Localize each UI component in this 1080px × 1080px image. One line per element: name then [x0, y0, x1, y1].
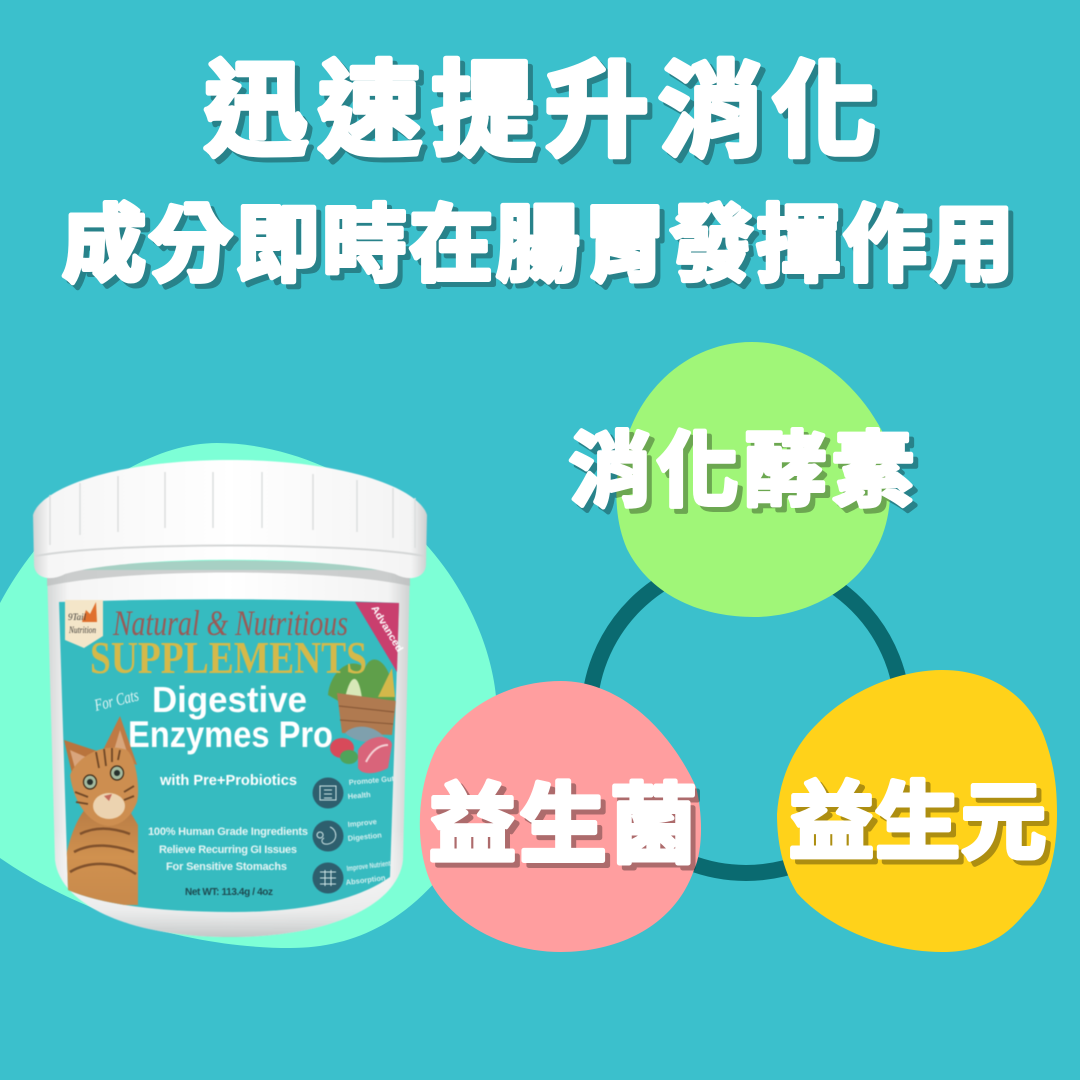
food: leaves — [328, 659, 395, 702]
food — [328, 659, 396, 773]
blob: probiotics (pink) — [420, 681, 701, 952]
jar lid — [33, 460, 427, 578]
enzymes pro: Enzymes Pro — [128, 714, 333, 755]
cat left ear — [64, 740, 96, 772]
label: prebiotics: 益生元 — [789, 776, 1046, 871]
benefit 1: 100% Human Grade Ingredients — [148, 826, 308, 838]
cat left pupil — [87, 779, 93, 785]
natural and nutritious: Natural & Nutritious — [112, 603, 348, 643]
blob: prebiotics (yellow) — [777, 670, 1057, 952]
lid underside shadow — [47, 560, 410, 586]
jar bottom shading — [54, 830, 404, 937]
lid ribs — [50, 472, 415, 548]
food: crate slats — [339, 706, 394, 724]
title line 2: 成分即時在腸胃發揮作用 — [62, 198, 1014, 292]
food: meat marbling — [366, 745, 388, 762]
product label background — [59, 599, 399, 912]
benefit 2: Relieve Recurring GI Issues — [159, 844, 297, 856]
icon captions — [345, 774, 395, 887]
label: probiotics: 益生菌 — [429, 777, 697, 874]
food: fish — [345, 727, 385, 742]
icon: absorption — [312, 862, 344, 894]
food: meat — [358, 737, 392, 773]
cat right pupil — [114, 770, 120, 776]
food: red garnish — [330, 738, 354, 758]
advanced corner — [355, 602, 399, 672]
icon: gut health — [312, 778, 344, 808]
cat left inner ear — [70, 750, 85, 767]
icon captions: Promote Gut — [348, 774, 395, 787]
digestive: Digestive — [152, 679, 307, 720]
advanced text: Advanced — [368, 604, 405, 654]
label: digestive enzymes: 消化酵素 — [569, 426, 914, 517]
brand text line 2: Nutrition — [68, 625, 96, 635]
icon: digestion — [312, 820, 344, 852]
icon captions: Improve Nutrient — [346, 859, 391, 873]
brand text: 9Tail — [68, 612, 87, 622]
food: yellow leaf — [378, 668, 395, 697]
cat photo — [64, 716, 138, 905]
mint blob behind product — [0, 443, 497, 948]
cat nose — [104, 794, 112, 801]
for cats: For Cats — [92, 685, 141, 715]
cat right ear — [102, 716, 137, 765]
lid rim line — [36, 546, 424, 556]
cat muzzle — [93, 793, 125, 819]
supplements heading: SUPPLEMENTS — [90, 633, 367, 683]
brand tag — [65, 600, 103, 648]
cat body — [64, 808, 138, 905]
cat head — [70, 748, 138, 826]
food: pale leaf — [345, 679, 362, 698]
food: green garnish — [340, 750, 358, 764]
jar body — [47, 570, 410, 937]
icon captions: Absorption — [345, 873, 386, 887]
food: crate — [337, 693, 396, 735]
benefit 3: For Sensitive Stomachs — [166, 861, 287, 873]
cat chest stripes — [70, 829, 136, 874]
cat head stripes — [75, 748, 134, 804]
title line 1: 迅速提升消化 — [204, 54, 876, 170]
product jar — [33, 460, 427, 937]
icon captions: Health — [347, 790, 371, 801]
with pre probiotics: with Pre+Probiotics — [159, 772, 297, 789]
cat right inner ear — [114, 730, 126, 750]
brand cat mark — [82, 602, 97, 622]
cat left eye — [84, 775, 96, 789]
blob: digestive enzymes (green) — [616, 342, 890, 617]
cat right eye — [110, 766, 124, 780]
icon captions: Digestion — [347, 830, 383, 843]
icon captions: Improve — [347, 817, 377, 829]
net weight: Net WT: 113.4g / 4oz — [185, 887, 273, 898]
connecting ring — [589, 559, 903, 873]
